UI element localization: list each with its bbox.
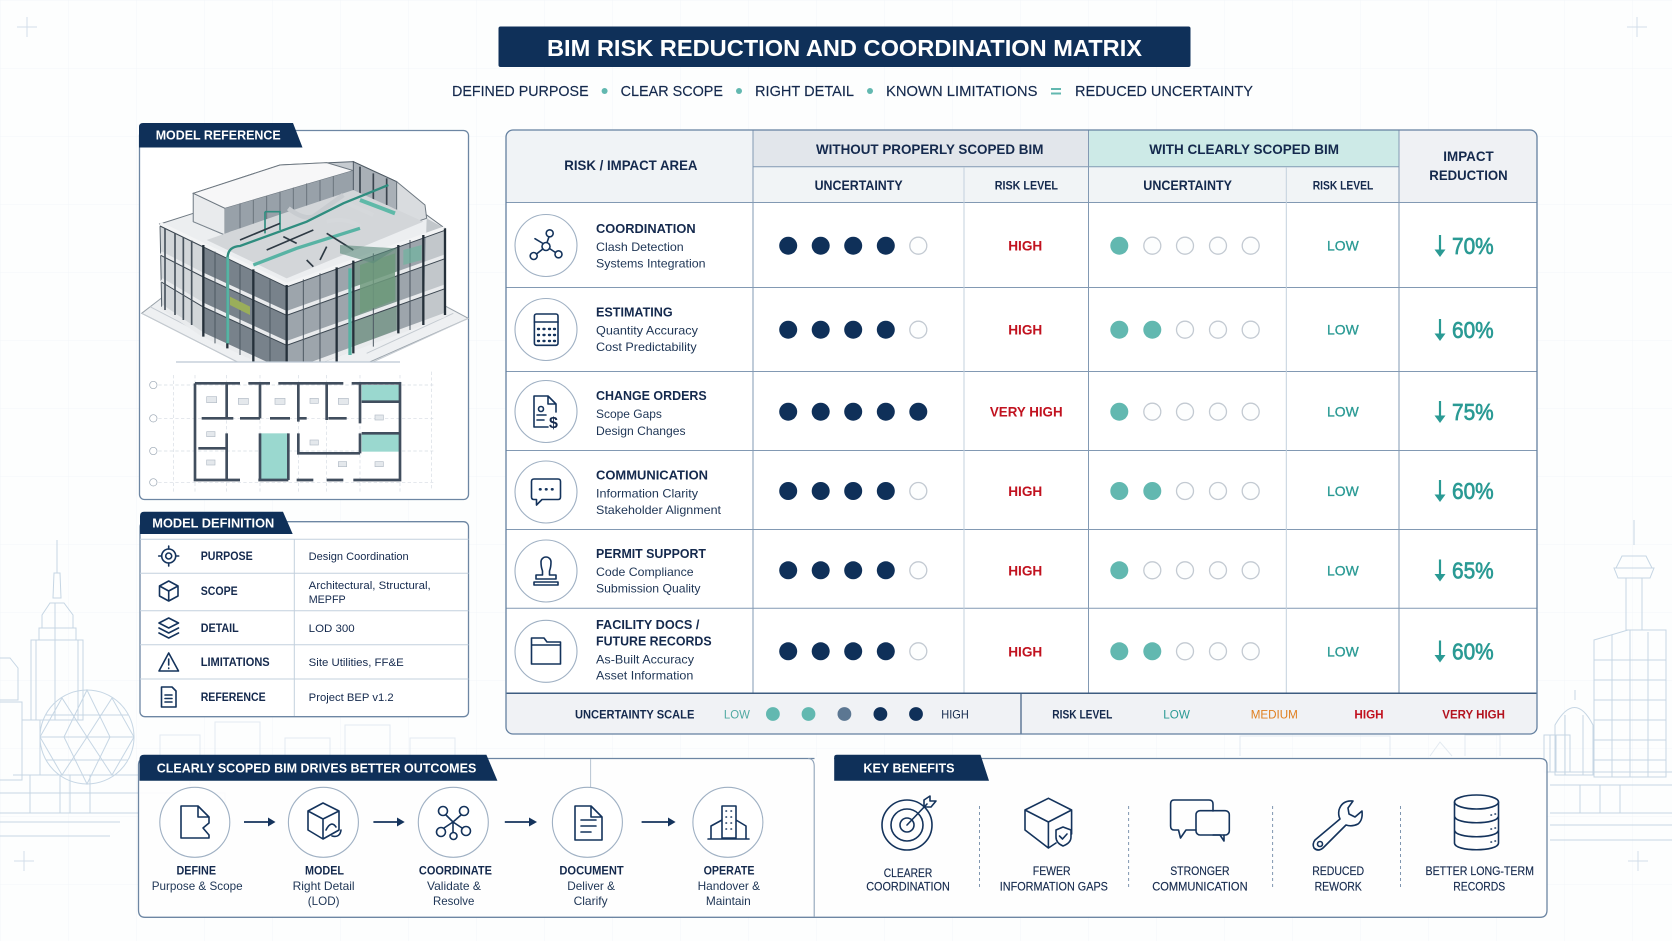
table column headings: RISK LEVEL (1313, 178, 1373, 192)
row: detail: DETAIL (201, 623, 239, 635)
uncertainty without BIM (779, 403, 927, 421)
text: coordination: COORDINATION (596, 222, 696, 236)
risk level without BIM: HIGH (1008, 562, 1042, 578)
step: operate: Handover & (698, 879, 760, 893)
legend: uncertainty scale: LOW (724, 708, 751, 722)
risk level without BIM: HIGH (1008, 643, 1042, 659)
risk level with BIM: LOW (1327, 643, 1359, 659)
row: communication (515, 461, 1494, 523)
uncertainty with BIM (1110, 482, 1259, 500)
impact reduction: 60% (1452, 478, 1494, 504)
step: coordinate: COORDINATE (419, 866, 492, 878)
benefit: reduced rework: REDUCED (1312, 866, 1364, 878)
table header backgrounds (506, 130, 1537, 734)
table column headings: WITHOUT PROPERLY SCOPED BIM (816, 141, 1043, 157)
icon: network (530, 230, 562, 260)
table column headings: RISK / IMPACT AREA (564, 157, 698, 173)
text: facility docs: Asset Information (596, 669, 693, 683)
row: detail: LOD 300 (309, 623, 355, 635)
risk level without BIM: HIGH (1008, 238, 1042, 254)
impact reduction: 70% (1452, 233, 1494, 259)
legend: risk level: VERY HIGH (1442, 708, 1505, 722)
table column headings: UNCERTAINTY (1143, 177, 1233, 193)
uncertainty without BIM (779, 237, 927, 255)
legend: uncertainty scale (575, 707, 969, 722)
step: operate (693, 787, 763, 908)
arrow (505, 818, 537, 826)
benefit: clearer coordination: CLEARER (884, 868, 932, 880)
icon: speech bubble (532, 479, 560, 505)
impact reduction (1434, 233, 1494, 259)
row: scope: MEPFP (309, 594, 346, 606)
benefit: reduced rework: REWORK (1315, 882, 1362, 894)
icon: calculator (534, 314, 558, 345)
icon: cost document (534, 396, 556, 427)
step: model: (LOD) (308, 894, 340, 908)
impact reduction (1434, 638, 1494, 664)
row: facility docs (515, 618, 1494, 683)
step: operate: Maintain (706, 894, 751, 908)
text: permit support: Code Compliance (596, 565, 694, 579)
benefit: stronger communication: STRONGER (1170, 866, 1230, 878)
impact reduction: 75% (1452, 399, 1494, 425)
uncertainty with BIM (1110, 237, 1259, 255)
subtitle equation: KNOWN LIMITATIONS (886, 83, 1038, 100)
text: change orders (596, 389, 707, 438)
benefit: fewer information gaps: INFORMATION GAPS (1000, 882, 1108, 894)
benefit: better long-term records (1426, 795, 1534, 894)
text: change orders: Design Changes (596, 424, 686, 438)
uncertainty with BIM (1110, 642, 1259, 660)
legend: risk level: RISK LEVEL (1052, 708, 1112, 722)
row: limitations: Site Utilities, FF&E (309, 657, 404, 669)
subtitle equation: REDUCED UNCERTAINTY (1075, 83, 1253, 100)
step: model: MODEL (305, 866, 344, 878)
text: facility docs (596, 618, 712, 683)
text: estimating: ESTIMATING (596, 306, 673, 320)
benefit: fewer information gaps: FEWER (1033, 866, 1071, 878)
benefit: stronger communication (1152, 800, 1248, 894)
background skyline left (0, 540, 225, 836)
benefit: fewer information gaps (1000, 798, 1108, 894)
subtitle equation: CLEAR SCOPE (621, 83, 723, 100)
row: reference (162, 687, 394, 707)
text: facility docs: FACILITY DOCS / (596, 618, 700, 632)
panel: key benefits (834, 755, 1534, 894)
impact reduction: 65% (1452, 558, 1494, 584)
heading: workflow (140, 755, 497, 781)
step: document: DOCUMENT (559, 866, 624, 878)
heading: model reference (139, 123, 302, 148)
row: purpose (159, 546, 409, 566)
text: permit support: PERMIT SUPPORT (596, 547, 706, 561)
text: communication: Information Clarity (596, 486, 698, 500)
heading: workflow: CLEARLY SCOPED BIM DRIVES BETTER OUTCOMES (157, 760, 477, 776)
benefit: better long-term records: BETTER LONG-TERM (1426, 866, 1534, 878)
benefit: clearer coordination: COORDINATION (866, 882, 950, 894)
risk level without BIM: VERY HIGH (990, 404, 1063, 420)
text: estimating: Quantity Accuracy (596, 324, 698, 338)
uncertainty without BIM (779, 561, 927, 579)
table column headings: WITH CLEARLY SCOPED BIM (1149, 141, 1339, 157)
legend: uncertainty scale: HIGH (941, 708, 969, 722)
uncertainty with BIM (1110, 561, 1259, 579)
risk level without BIM: HIGH (1008, 322, 1042, 338)
subtitle equation (452, 83, 1253, 100)
risk level with BIM: LOW (1327, 483, 1359, 499)
heading: key benefits (834, 755, 989, 781)
legend: risk level: MEDIUM (1251, 708, 1298, 722)
text: coordination: Systems Integration (596, 256, 706, 270)
arrow (373, 818, 405, 826)
step: define: Purpose & Scope (152, 879, 243, 893)
table column headings: UNCERTAINTY (815, 177, 903, 193)
uncertainty without BIM (779, 482, 927, 500)
text: estimating (596, 306, 698, 354)
text: coordination (596, 222, 706, 270)
row: coordination (515, 214, 1494, 276)
impact reduction (1434, 558, 1494, 584)
step: coordinate: Validate & (427, 879, 481, 893)
step: operate: OPERATE (704, 866, 755, 878)
row: change orders (515, 380, 1494, 442)
risk level with BIM: LOW (1327, 238, 1359, 254)
panel: bottom band background (138, 758, 1547, 917)
step: document: Clarify (574, 894, 608, 908)
row: scope (160, 580, 431, 606)
benefit: reduced rework (1312, 801, 1364, 894)
table column headings: REDUCTION (1429, 167, 1508, 183)
table column headings (564, 141, 1508, 193)
legend: risk level: LOW (1163, 708, 1191, 722)
impact reduction (1434, 399, 1494, 425)
panel: process workflow (140, 755, 834, 917)
step: define (152, 787, 243, 893)
benefit: clearer coordination (866, 796, 950, 894)
icon: stamp (534, 557, 558, 585)
row: permit support (515, 540, 1494, 602)
panel: model reference (139, 123, 468, 500)
step: define: DEFINE (176, 866, 216, 878)
text: communication: Stakeholder Alignment (596, 503, 722, 517)
risk level without BIM: HIGH (1008, 483, 1042, 499)
step: model: Right Detail (293, 879, 355, 893)
panel: model definition (140, 512, 468, 717)
text: change orders: CHANGE ORDERS (596, 389, 707, 403)
text: permit support (596, 547, 706, 596)
isometric BIM building model (142, 162, 468, 377)
row: scope: SCOPE (201, 586, 238, 598)
icon: folder (532, 638, 560, 664)
step: document (552, 759, 624, 908)
row: limitations: LIMITATIONS (201, 657, 270, 669)
step: document: Deliver & (567, 879, 615, 893)
risk level with BIM: LOW (1327, 322, 1359, 338)
heading: model definition: MODEL DEFINITION (152, 516, 274, 530)
legend: risk level (1052, 708, 1505, 722)
step: coordinate: Resolve (433, 894, 475, 908)
row: reference: REFERENCE (201, 692, 266, 704)
subtitle equation: RIGHT DETAIL (755, 83, 854, 100)
impact reduction: 60% (1452, 638, 1494, 664)
floor plan (150, 372, 433, 493)
step: model (288, 787, 358, 908)
arrow (244, 818, 276, 826)
text: estimating: Cost Predictability (596, 340, 697, 354)
text: communication (596, 468, 722, 517)
row: purpose: Design Coordination (309, 551, 409, 563)
legend: uncertainty scale: UNCERTAINTY SCALE (575, 708, 694, 722)
legend: risk level: HIGH (1354, 708, 1384, 722)
impact reduction (1434, 478, 1494, 504)
row: reference: Project BEP v1.2 (309, 692, 394, 704)
subtitle equation: DEFINED PURPOSE (452, 83, 589, 100)
title: BIM RISK REDUCTION AND COORDINATION MATRIX (547, 35, 1142, 61)
text: permit support: Submission Quality (596, 582, 701, 596)
risk level with BIM: LOW (1327, 562, 1359, 578)
heading: model definition (140, 512, 293, 534)
heading: model reference: MODEL REFERENCE (156, 128, 281, 142)
panel: risk matrix table (506, 130, 1537, 734)
uncertainty without BIM (779, 642, 927, 660)
row: purpose: PURPOSE (201, 551, 253, 563)
heading: key benefits: KEY BENEFITS (863, 760, 955, 776)
uncertainty with BIM (1110, 403, 1259, 421)
row: detail (159, 618, 355, 638)
uncertainty without BIM (779, 321, 927, 339)
dollar sign: $ (549, 415, 558, 432)
risk level with BIM: LOW (1327, 404, 1359, 420)
text: change orders: Scope Gaps (596, 407, 662, 421)
faint skyline behind panels (160, 722, 1500, 756)
row: estimating (515, 298, 1494, 360)
title (498, 26, 1190, 67)
table column headings: RISK LEVEL (995, 178, 1058, 192)
text: communication: COMMUNICATION (596, 468, 708, 482)
uncertainty with BIM (1110, 321, 1259, 339)
model base rule (176, 361, 400, 363)
text: coordination: Clash Detection (596, 240, 684, 254)
row: limitations (159, 653, 404, 671)
benefit: better long-term records: RECORDS (1453, 882, 1505, 894)
table column headings: IMPACT (1443, 148, 1494, 164)
benefit: stronger communication: COMMUNICATION (1152, 882, 1248, 894)
text: facility docs: As-Built Accuracy (596, 652, 694, 666)
arrow (642, 818, 676, 826)
impact reduction (1434, 317, 1494, 343)
text: facility docs: FUTURE RECORDS (596, 634, 712, 648)
row: scope: Architectural, Structural, (309, 580, 431, 592)
impact reduction: 60% (1452, 317, 1494, 343)
background skyline right (1544, 520, 1672, 840)
step: coordinate (418, 787, 492, 908)
